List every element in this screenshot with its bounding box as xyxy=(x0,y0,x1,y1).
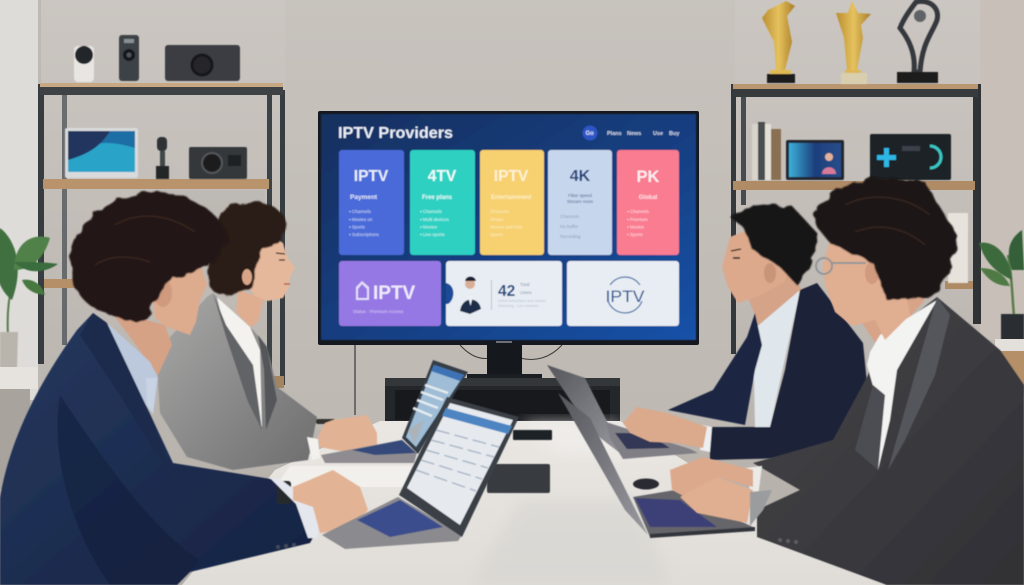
laptop: woman's xyxy=(321,360,468,463)
provider card: 4K light blue: Fiber speed xyxy=(568,193,592,198)
mouse xyxy=(633,478,659,490)
TV stand and media console xyxy=(354,343,620,421)
laptop: man 3 xyxy=(547,365,698,459)
lapel xyxy=(888,297,950,470)
provider card: 4TV teal: Free plans xyxy=(422,195,453,201)
right potted plant xyxy=(979,230,1024,341)
left white counter xyxy=(0,367,38,489)
icon: dark sculpture trophy xyxy=(897,1,938,83)
banner: purple IPTV xyxy=(339,261,441,326)
provider card: 4TV teal: ▪ Channels xyxy=(420,209,443,214)
neck xyxy=(110,310,172,375)
provider card: PK pink: ▪ Sports xyxy=(627,232,644,237)
provider card: 4K light blue: 4K xyxy=(570,168,591,185)
icon: books xyxy=(752,122,781,180)
ear xyxy=(865,262,879,284)
provider card: PK pink: Global xyxy=(639,195,658,201)
lips xyxy=(284,283,290,285)
phone on table xyxy=(513,430,552,440)
right shelving unit xyxy=(731,84,981,354)
dark tablet xyxy=(487,464,550,493)
right counter xyxy=(995,339,1024,395)
sleeve shadow xyxy=(57,395,200,585)
provider card: 4K light blue: Recording xyxy=(560,234,581,239)
watch xyxy=(316,419,335,424)
provider card: IPTV blue: ▪ Channels xyxy=(349,209,372,214)
icon: gold figure trophy xyxy=(762,1,795,83)
icon: small laptop xyxy=(65,128,138,178)
provider card: 4TV teal: ▪ Live sports xyxy=(420,232,445,237)
table items xyxy=(275,430,659,493)
provider card: IPTV yellow: Entertainment xyxy=(491,195,531,201)
provider card: IPTV yellow: Movies and kids xyxy=(490,224,523,230)
provider card: IPTV yellow: Channels xyxy=(490,209,510,214)
person: man in charcoal suit (front right) xyxy=(670,177,1024,585)
banner: purple IPTV: IPTV xyxy=(373,283,416,304)
icon: desk camera xyxy=(156,137,169,179)
banner: profile stat: Users xyxy=(520,290,533,295)
banner: profile stat: Total xyxy=(520,282,530,287)
provider card: 4TV teal: ▪ Multi devices xyxy=(420,217,450,222)
eye and brow xyxy=(731,249,741,258)
provider card: IPTV yellow: IPTV xyxy=(494,168,529,185)
icon: camera box xyxy=(189,147,247,179)
watch xyxy=(750,490,772,526)
neck xyxy=(745,270,803,335)
face xyxy=(244,222,295,301)
neck and shirt xyxy=(236,290,264,327)
hand xyxy=(318,415,377,453)
provider card: IPTV yellow xyxy=(480,150,544,255)
right shelf objects xyxy=(752,122,968,283)
banner: profile stat: Streaming · Live channels xyxy=(498,304,539,308)
hair xyxy=(70,192,227,321)
provider card: 4K light blue: No buffer xyxy=(560,224,579,229)
provider card: 4TV teal: 4TV xyxy=(428,168,457,185)
provider card: 4K light blue xyxy=(548,150,612,255)
provider card: PK pink: ▪ Movies xyxy=(627,224,645,230)
hands xyxy=(293,470,368,533)
suit left front xyxy=(668,313,762,425)
blazer xyxy=(157,293,317,470)
screen navigation: News xyxy=(627,131,641,137)
ear xyxy=(154,279,172,307)
watch xyxy=(277,481,291,504)
shirt xyxy=(867,300,937,470)
provider card: 4K light blue: Channels xyxy=(560,214,580,219)
upper hand xyxy=(670,457,753,497)
provider card: IPTV blue: ▪ Sports xyxy=(349,224,366,230)
TV xyxy=(318,111,699,345)
shirt sliver xyxy=(146,378,157,414)
provider card: PK pink xyxy=(617,150,679,255)
TV screen xyxy=(321,114,696,340)
icon: gold star trophy xyxy=(836,1,871,84)
provider card: IPTV blue: Payment xyxy=(350,194,378,201)
icon: home xyxy=(356,281,369,300)
suit xyxy=(753,297,1024,585)
hair xyxy=(813,177,958,300)
cuff xyxy=(270,478,318,538)
buttons xyxy=(778,538,782,542)
provider card: PK pink: ▪ Channels xyxy=(627,209,650,214)
provider card: 4K light blue: Stream more xyxy=(567,199,593,204)
suit right front xyxy=(710,283,867,460)
eye and brow xyxy=(276,253,285,260)
icon: projector box xyxy=(165,45,240,81)
paper notepad xyxy=(275,466,412,487)
ear xyxy=(764,263,776,283)
suit xyxy=(0,313,317,585)
lapel shadow xyxy=(213,293,262,430)
face xyxy=(722,225,790,303)
banner: profile stat: 42 xyxy=(498,283,515,300)
provider card: IPTV blue: IPTV xyxy=(354,168,389,185)
hair xyxy=(730,205,817,285)
shirt collar xyxy=(106,322,158,414)
lower hand xyxy=(680,477,753,523)
icon: security camera xyxy=(119,35,139,81)
person: man in dark navy suit (back right) xyxy=(623,205,867,460)
provider card: IPTV blue: ▪ Movies on xyxy=(349,217,373,222)
person: woman in grey blazer xyxy=(157,202,377,470)
neck xyxy=(860,270,925,350)
screen navigation: Plans xyxy=(607,131,622,137)
face xyxy=(150,262,207,335)
trophies xyxy=(762,1,938,84)
hair highlights xyxy=(95,216,195,265)
provider card: 4TV teal xyxy=(410,150,475,255)
banner: profile stat xyxy=(446,261,562,326)
hands xyxy=(623,407,707,448)
hair xyxy=(208,202,288,295)
cuff xyxy=(745,466,762,497)
cuff xyxy=(307,437,320,460)
ear xyxy=(242,269,252,285)
provider card: IPTV yellow: Shows xyxy=(490,217,504,222)
provider card: IPTV blue xyxy=(339,150,404,255)
provider card: 4TV teal: ▪ Movies xyxy=(420,224,438,230)
screen navigation xyxy=(582,126,680,140)
person: man in navy suit (front left) xyxy=(0,192,368,585)
banner: purple IPTV: Status · Premium Access xyxy=(353,309,404,314)
icon: picture frame xyxy=(948,213,968,283)
provider card: IPTV yellow: Sports xyxy=(490,232,504,237)
banner: IPTV logo xyxy=(567,261,679,326)
cuff xyxy=(700,425,712,452)
screen title: IPTV Providers xyxy=(338,125,453,142)
table xyxy=(182,421,886,585)
banner: IPTV logo: IPTV xyxy=(606,287,645,306)
lapel xyxy=(80,313,173,480)
left shelf objects xyxy=(65,35,247,179)
buttons xyxy=(276,545,280,549)
provider card: IPTV blue: ▪ Subscriptions xyxy=(349,232,380,237)
laptop: right front xyxy=(558,393,755,538)
screen navigation: Go xyxy=(586,131,594,137)
left potted plant xyxy=(0,228,58,368)
shirt xyxy=(753,290,800,427)
banner: profile stat: Active subscribers and viewers xyxy=(498,299,546,303)
screen navigation: Use xyxy=(653,131,663,137)
icon: tablet xyxy=(786,140,844,180)
screen navigation: Buy xyxy=(669,131,680,137)
glasses xyxy=(816,258,866,274)
left shelving unit xyxy=(38,83,285,388)
provider card: PK pink: PK xyxy=(637,168,660,186)
shirt xyxy=(217,297,262,427)
icon: dark medical device xyxy=(870,134,951,180)
laptop: left front xyxy=(322,397,519,549)
hair highlights xyxy=(845,197,930,245)
provider card: PK pink: ▪ Premium xyxy=(627,217,648,222)
icon: smart speaker xyxy=(74,46,94,82)
face xyxy=(823,240,910,340)
